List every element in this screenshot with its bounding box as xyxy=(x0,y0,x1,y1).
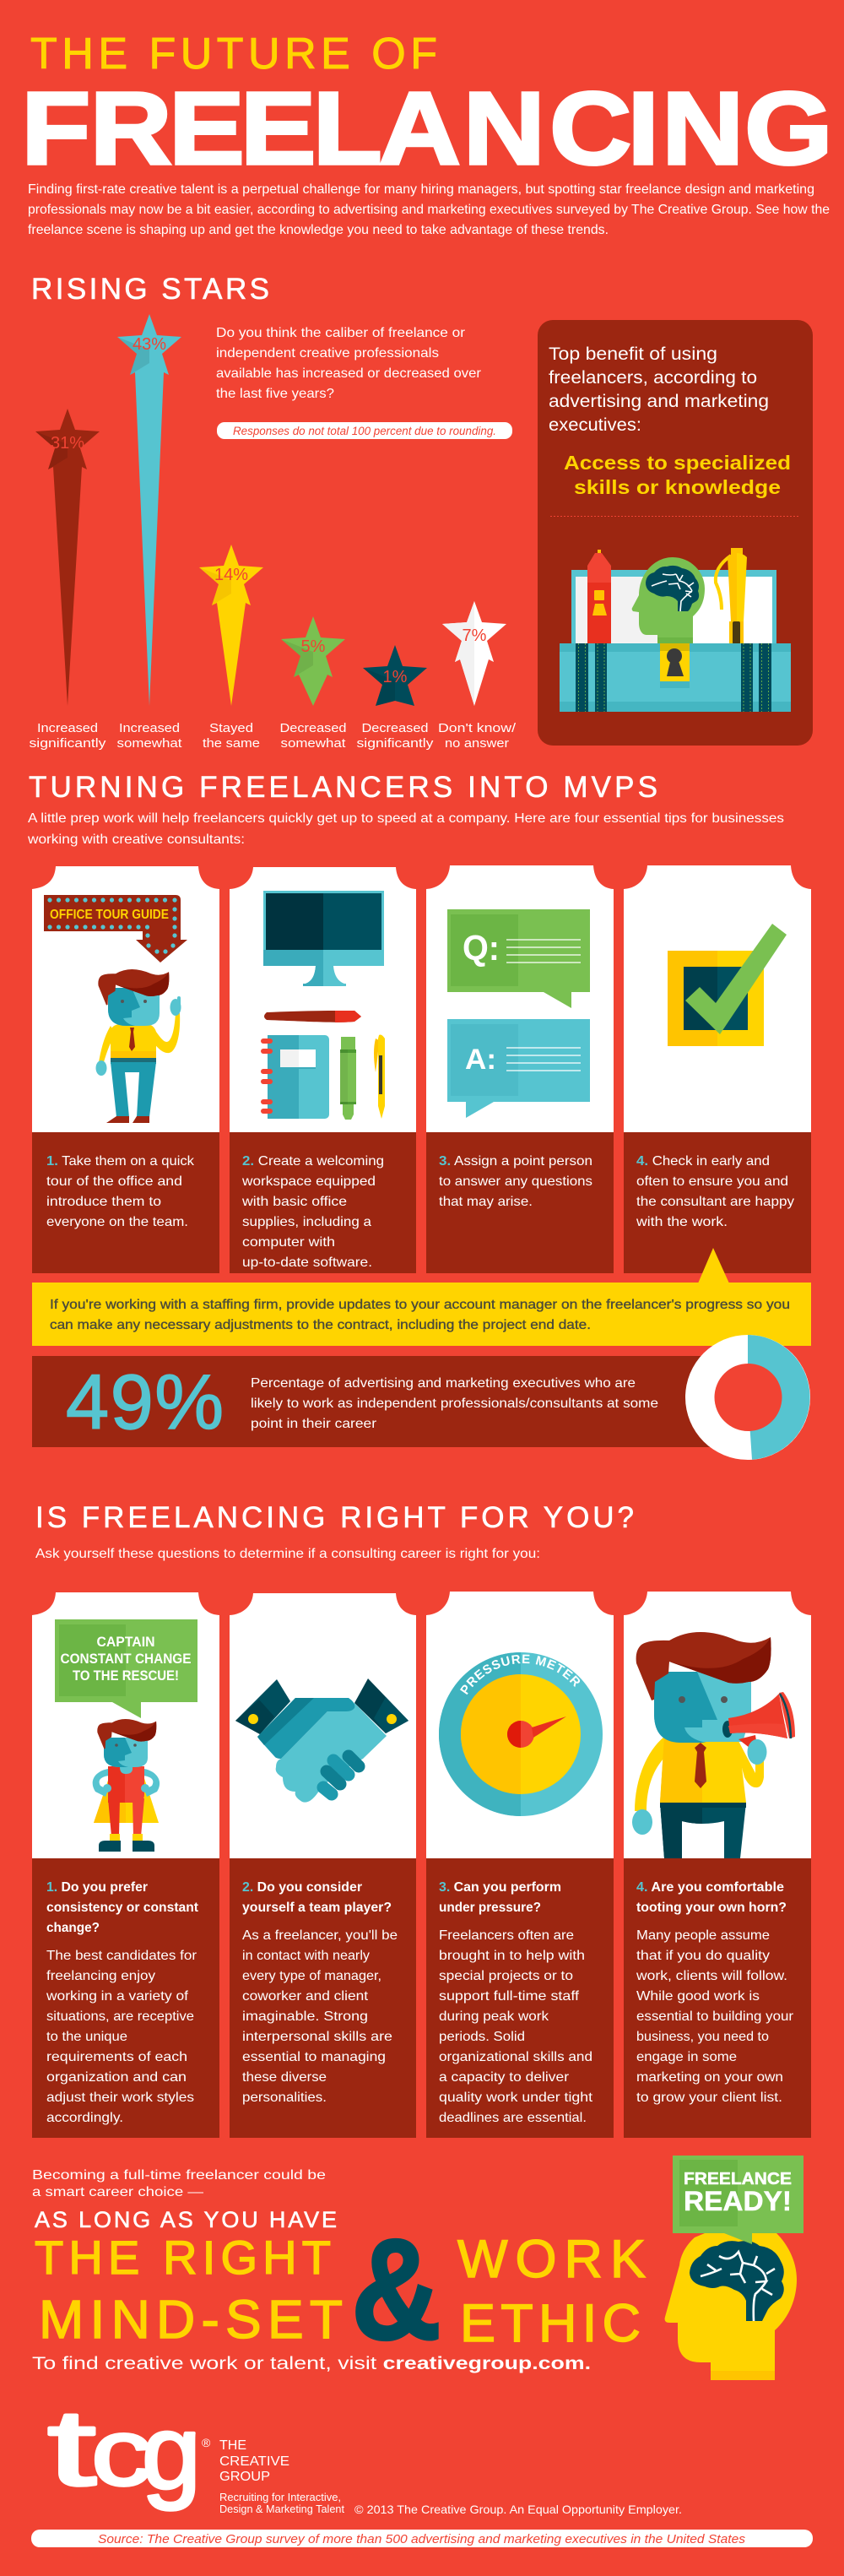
tip 3 text xyxy=(439,1154,592,1209)
callout: staffing firm tip: If you're working with a staffing firm, provide updates to your account manager on the freelancer's progress so you xyxy=(50,1298,790,1312)
speech bubble: captain constant change: TO THE RESCUE! xyxy=(73,1668,179,1684)
icon: paintbrush xyxy=(264,1011,361,1022)
question 2 text: these diverse xyxy=(242,2070,327,2085)
intro paragraph: professionals may now be a bit easier, according to advertising and marketing executives surveyed by The Creative Group. See how the xyxy=(28,203,830,217)
question 2 text: interpersonal skills are xyxy=(242,2030,392,2044)
question 1 text xyxy=(46,1880,199,2125)
icon: answer bubble: A: xyxy=(465,1044,496,1076)
rounding note pill: Responses do not total 100 percent due to rounding. xyxy=(233,425,496,437)
tip 3 text: that may arise. xyxy=(439,1195,533,1209)
question 1 text: situations, are receptive xyxy=(46,2009,194,2024)
star bar: 31% increased significantly xyxy=(35,409,100,706)
stat description: Percentage of advertising and marketing executives who are xyxy=(251,1376,636,1391)
logo: the creative group: THE xyxy=(219,2438,246,2453)
speech bubble: captain constant change: CAPTAIN xyxy=(96,1635,155,1650)
question 1 text: organization and can xyxy=(46,2070,187,2085)
logo: the creative group: t xyxy=(47,2388,96,2508)
icon: monitor xyxy=(263,891,384,986)
section intro text: Ask yourself these questions to determine if a consulting career is right for you: xyxy=(35,1547,540,1561)
tip 2 text: supplies, including a xyxy=(242,1215,371,1229)
question 2 text: coworker and client xyxy=(242,1989,369,2004)
question 3 text: special projects or to xyxy=(439,1969,573,1983)
heading: turning freelancers into mvps: TURNING FREELANCERS INTO MVPS xyxy=(29,771,657,804)
star bar: 43% increased somewhat xyxy=(117,314,181,706)
star: 1% decreased significantly xyxy=(363,645,427,706)
question card 4 xyxy=(624,1592,811,2138)
logo: the creative group: GROUP xyxy=(219,2470,270,2484)
highlighted benefit xyxy=(564,452,791,498)
big words: the right mind-set: MIND-SET xyxy=(39,2289,343,2350)
tip 1 text xyxy=(46,1154,195,1229)
star bar: 43% increased somewhat: 43% xyxy=(133,335,166,354)
highlighted benefit: Access to specialized xyxy=(564,452,791,474)
question 2 text: yourself a team player? xyxy=(242,1901,392,1915)
star bar: 7% don't know: 7% xyxy=(463,626,487,645)
rounding note pill xyxy=(217,422,512,439)
closing lead-in: a smart career choice — xyxy=(32,2185,203,2199)
chart category labels: somewhat xyxy=(280,736,346,751)
closing lead-in xyxy=(32,2168,337,2232)
question 3 text: quality work under tight xyxy=(439,2091,593,2105)
question 1 text: consistency or constant xyxy=(46,1901,199,1915)
closing lead-in: Becoming a full-time freelancer could be xyxy=(32,2168,326,2183)
question 4 text: to grow your client list. xyxy=(636,2091,782,2105)
tip 1 text: tour of the office and xyxy=(46,1174,182,1189)
section intro text: working with creative consultants: xyxy=(27,832,245,847)
panel intro text: executives: xyxy=(549,415,641,435)
tip card 2 xyxy=(230,867,416,1273)
star bar: 5% decreased somewhat xyxy=(281,616,345,706)
sign: office tour guide arrow xyxy=(44,895,187,963)
tip 3 text: to answer any questions xyxy=(439,1174,592,1189)
closing message xyxy=(32,2168,646,2373)
chart category labels: Increased xyxy=(37,721,98,735)
big words: work ethic: ETHIC xyxy=(460,2294,641,2353)
question 1 text: to the unique xyxy=(46,2030,127,2044)
sign: office tour guide arrow: OFFICE TOUR GUIDE xyxy=(50,908,169,922)
tip 1 text: 1. Take them on a quick xyxy=(46,1154,195,1169)
question 2 text: essential to managing xyxy=(242,2050,386,2064)
question 3 text: deadlines are essential. xyxy=(439,2111,587,2125)
question 3 text: organizational skills and xyxy=(439,2050,592,2064)
tip card 1 xyxy=(32,866,219,1273)
highlighted benefit: skills or knowledge xyxy=(574,476,781,498)
big words: the right mind-set: THE RIGHT xyxy=(35,2231,331,2284)
star bar: 14% stayed the same xyxy=(199,545,263,706)
question 3 text xyxy=(439,1880,593,2125)
tip 3 text: 3. Assign a point person xyxy=(439,1154,592,1169)
star bar: 5% decreased somewhat: 5% xyxy=(301,637,326,656)
panel: top benefit xyxy=(538,320,813,746)
stat panel: 49% xyxy=(32,1335,810,1460)
callout: staffing firm tip xyxy=(32,1248,811,1346)
chart category labels: Don't know/ xyxy=(438,721,517,735)
tip 4 text: with the work. xyxy=(636,1215,728,1229)
question card 2 xyxy=(230,1593,416,2138)
tip 1 text: introduce them to xyxy=(46,1195,161,1209)
survey question: the last five years? xyxy=(216,387,334,401)
icon: marker xyxy=(340,1037,356,1120)
question 4 text: engage in some xyxy=(636,2050,737,2064)
survey question: available has increased or decreased over xyxy=(216,366,482,381)
tip 2 text: with basic office xyxy=(241,1195,347,1209)
chart category labels: Increased xyxy=(119,721,180,735)
big words: work ethic: WORK xyxy=(457,2230,646,2289)
question 2 text xyxy=(242,1880,398,2105)
question 3 text: under pressure? xyxy=(439,1901,541,1915)
icon: pen xyxy=(374,1035,385,1119)
stat description xyxy=(251,1376,658,1431)
chart category labels: significantly xyxy=(29,736,106,751)
source pill xyxy=(31,2530,813,2547)
question 4 text: that if you do quality xyxy=(636,1949,770,1963)
survey question: Do you think the caliber of freelance or xyxy=(216,326,466,340)
logo: the creative group: g xyxy=(142,2394,201,2511)
call to action: To find creative work or talent, visit creativegroup.com. xyxy=(32,2354,591,2373)
question 4 text xyxy=(636,1880,794,2105)
icon: toolbox with head and pens xyxy=(560,548,791,712)
star: 1% decreased significantly: 1% xyxy=(383,668,408,686)
callout: staffing firm tip: can make any necessary adjustments to the contract, including the project end date. xyxy=(50,1318,591,1332)
star chart xyxy=(29,314,517,751)
icon: answer bubble xyxy=(447,1019,590,1118)
title line: the future of: THE FUTURE OF xyxy=(30,30,437,79)
star bar: 31% increased significantly: 31% xyxy=(51,434,84,453)
question 4 text: Many people assume xyxy=(636,1928,770,1943)
logo: the creative group: ® xyxy=(202,2436,211,2449)
speech bubble: captain constant change xyxy=(55,1619,197,1718)
question 3 text: Freelancers often are xyxy=(439,1928,574,1943)
logo: the creative group: CREATIVE xyxy=(219,2454,289,2469)
icon: question bubble xyxy=(447,909,590,1008)
question 3 text: periods. Solid xyxy=(439,2030,525,2044)
question 2 text: 2. Do you consider xyxy=(242,1880,362,1895)
question card 3 xyxy=(426,1592,614,2138)
question 2 text: in contact with nearly xyxy=(242,1949,370,1963)
tip 2 text: up-to-date software. xyxy=(242,1255,372,1270)
question 1 text: The best candidates for xyxy=(46,1949,197,1963)
donut chart xyxy=(685,1335,810,1460)
chart category labels: Decreased xyxy=(280,721,346,735)
tip 2 text: workspace equipped xyxy=(241,1174,376,1189)
panel intro text xyxy=(549,344,769,435)
icon: head with brain and freelance ready sign: READY! xyxy=(684,2186,792,2216)
question 4 text: While good work is xyxy=(636,1989,760,2004)
logo: the creative group: Design & Marketing Talent xyxy=(219,2503,345,2515)
heading: rising stars: RISING STARS xyxy=(31,273,269,306)
logo: the creative group: Recruiting for Interactive, xyxy=(219,2492,341,2503)
chart category labels: Stayed xyxy=(209,721,253,735)
character: man with megaphone xyxy=(632,1632,795,1858)
logo: the creative group: c xyxy=(91,2400,152,2505)
tip 4 text: the consultant are happy xyxy=(636,1195,794,1209)
question 3 text: brought in to help with xyxy=(439,1949,585,1963)
chart category labels: no answer xyxy=(445,736,509,751)
question 1 text: accordingly. xyxy=(46,2111,123,2125)
question 1 text: working in a variety of xyxy=(46,1989,189,2004)
icon: question bubble: Q: xyxy=(463,928,500,968)
stat description: point in their career xyxy=(251,1417,377,1431)
tip card 4 xyxy=(624,865,811,1273)
stat number: 49% xyxy=(66,1359,224,1445)
character: tour guide xyxy=(96,969,181,1123)
question 4 text: business, you need to xyxy=(636,2030,769,2044)
tip 2 text: 2. Create a welcoming xyxy=(242,1154,384,1169)
question 3 text: during peak work xyxy=(439,2009,549,2024)
icon: pressure meter: PRESSURE METER xyxy=(460,1655,581,1695)
panel intro text: Top benefit of using xyxy=(549,344,717,364)
survey question xyxy=(216,326,482,401)
icon: checkmark box xyxy=(668,924,787,1046)
question 4 text: marketing on your own xyxy=(636,2070,783,2085)
question 3 text: a capacity to deliver xyxy=(439,2070,570,2085)
section intro text: A little prep work will help freelancers quickly get up to speed at a company. Here are four essential tips for businesses xyxy=(28,811,784,826)
question 1 text: 1. Do you prefer xyxy=(46,1880,148,1895)
question 2 text: personalities. xyxy=(242,2091,327,2105)
question 1 text: requirements of each xyxy=(46,2050,187,2064)
question 1 text: change? xyxy=(46,1921,100,1935)
question 2 text: As a freelancer, you'll be xyxy=(242,1928,398,1943)
tip 4 text xyxy=(636,1154,794,1229)
tip 2 text: computer with xyxy=(242,1235,335,1250)
heading: is freelancing right for you: IS FREELANCING RIGHT FOR YOU? xyxy=(35,1501,634,1534)
question 4 text: 4. Are you comfortable xyxy=(636,1880,784,1895)
speech bubble: captain constant change: CONSTANT CHANGE xyxy=(61,1651,191,1667)
question 2 text: imaginable. Strong xyxy=(242,2009,368,2024)
logo: the creative group xyxy=(47,2388,345,2515)
source pill: Source: The Creative Group survey of more than 500 advertising and marketing executives in the United States xyxy=(98,2532,746,2546)
chart category labels: the same xyxy=(203,736,260,751)
big words: the right mind-set xyxy=(35,2231,343,2350)
intro paragraph xyxy=(28,182,830,237)
question card 1 xyxy=(32,1592,219,2138)
big words: work ethic xyxy=(457,2230,646,2353)
ampersand: & xyxy=(351,2210,441,2370)
question 3 text: support full-time staff xyxy=(439,1989,580,2004)
panel intro text: advertising and marketing xyxy=(549,392,769,411)
panel intro text: freelancers, according to xyxy=(549,368,757,388)
closing lead-in: AS LONG AS YOU HAVE xyxy=(35,2207,337,2232)
question 2 text: every type of manager, xyxy=(242,1969,381,1983)
chart category labels xyxy=(29,721,517,751)
tip 4 text: often to ensure you and xyxy=(636,1174,788,1189)
stat description: likely to work as independent professionals/consultants at some xyxy=(251,1396,658,1411)
character: superhero xyxy=(93,1719,160,1852)
title line: freelancing: FREELANCING xyxy=(21,72,833,187)
tip card 3 xyxy=(426,865,614,1273)
question 1 text: adjust their work styles xyxy=(46,2091,194,2105)
question 3 text: 3. Can you perform xyxy=(439,1880,561,1895)
title xyxy=(21,30,833,187)
section intro text xyxy=(27,811,784,847)
chart category labels: somewhat xyxy=(116,736,182,751)
chart category labels: significantly xyxy=(356,736,434,751)
chart category labels: Decreased xyxy=(361,721,429,735)
tip 2 text xyxy=(241,1154,384,1270)
copyright line: © 2013 The Creative Group. An Equal Opportunity Employer. xyxy=(354,2503,682,2516)
question 4 text: essential to building your xyxy=(636,2009,794,2024)
icon: head with brain and freelance ready sign: FREELANCE xyxy=(684,2170,792,2188)
tip 1 text: everyone on the team. xyxy=(46,1215,188,1229)
icon: pressure meter xyxy=(439,1652,603,1816)
survey question: independent creative professionals xyxy=(216,346,439,361)
intro paragraph: freelance scene is shaping up and get the knowledge you need to take advantage of these trends. xyxy=(28,223,609,237)
question 4 text: work, clients will follow. xyxy=(636,1969,787,1983)
star bar: 14% stayed the same: 14% xyxy=(214,566,248,584)
icon: notebook xyxy=(261,1035,329,1119)
icon: handshake xyxy=(235,1678,408,1803)
question 1 text: freelancing enjoy xyxy=(46,1969,155,1983)
icon: head with brain and freelance ready sign xyxy=(665,2156,803,2380)
question 4 text: tooting your own horn? xyxy=(636,1901,787,1915)
intro paragraph: Finding first-rate creative talent is a perpetual challenge for many hiring managers, but spotting star freelance design and marketing xyxy=(28,182,814,197)
star bar: 7% don't know xyxy=(442,601,506,706)
tip 4 text: 4. Check in early and xyxy=(636,1154,770,1169)
